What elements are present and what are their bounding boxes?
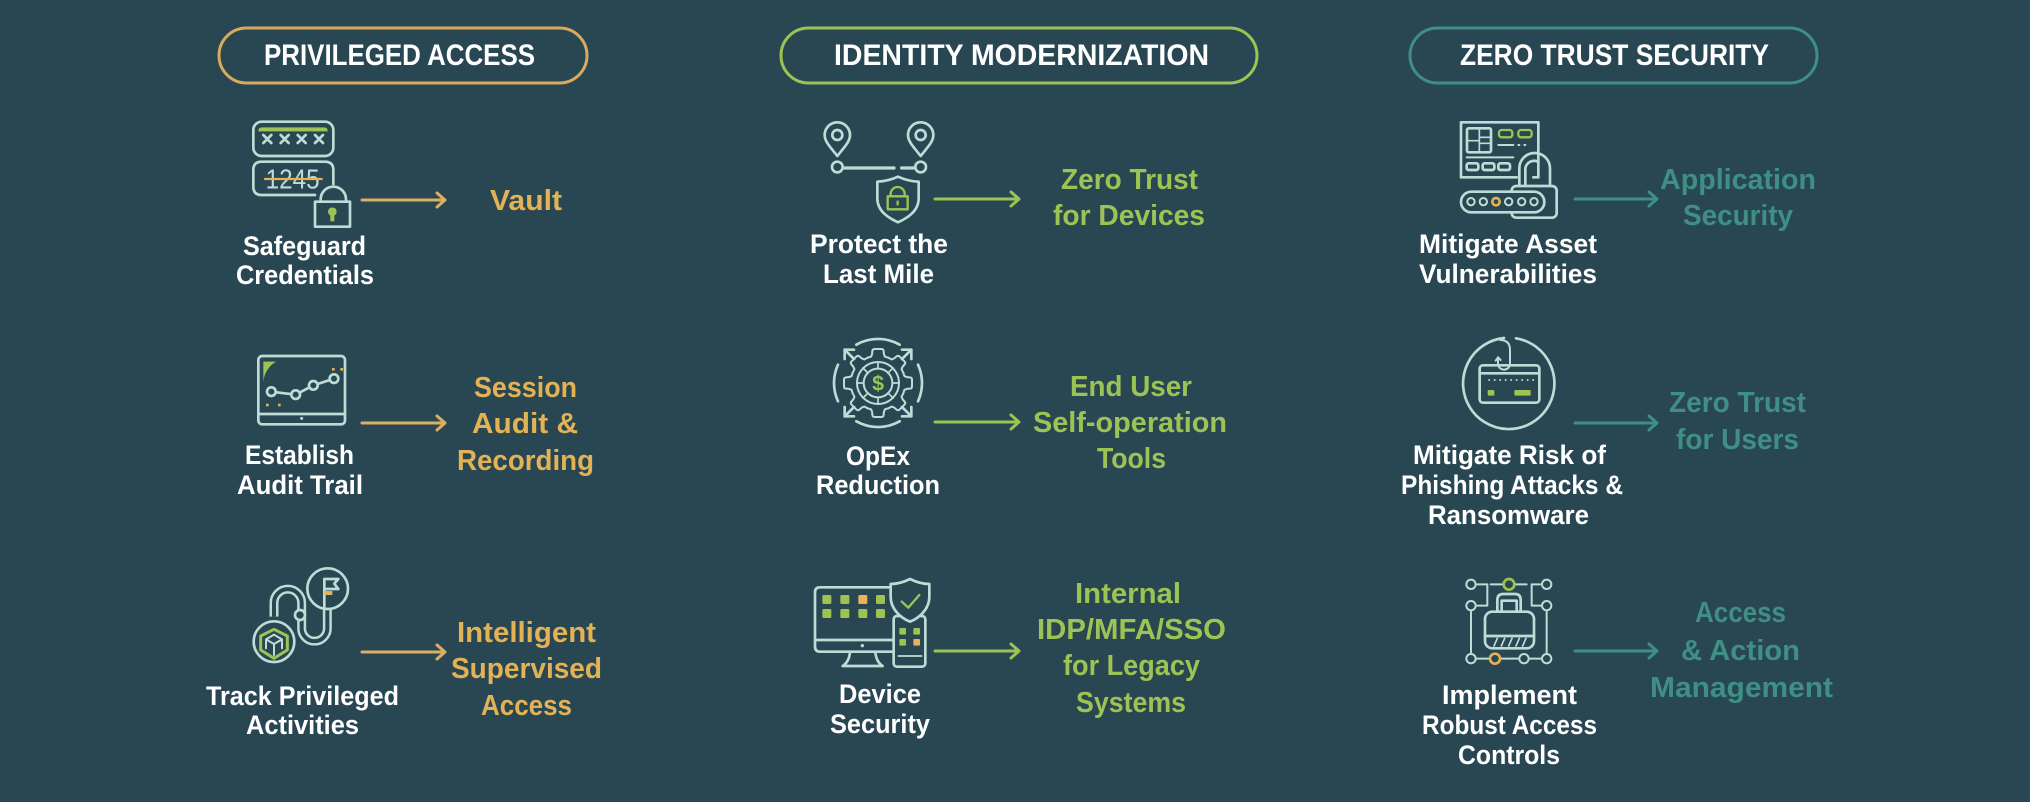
heading: identity modernization [781,28,1257,83]
label: track privileged activities [206,681,399,740]
heading: zero trust security [1410,28,1817,83]
icon: opex gear with dollar [834,339,922,427]
result: application security: Security [1683,200,1793,232]
label: opex reduction: Reduction [816,470,940,500]
label: opex reduction: OpEx [846,441,910,471]
result: intelligent supervised access: Intelligent [457,617,597,649]
result: end user self-operation tools: Self-operation [1033,407,1227,439]
result: internal idp mfa sso for legacy systems: IDP/MFA/SSO [1037,614,1226,646]
label: device security: Device [839,679,921,709]
label: mitigate risk of phishing attacks and ransomware: Mitigate Risk of [1413,440,1607,470]
result: access and action management [1650,597,1834,704]
result: zero trust for users [1669,387,1806,456]
label: device security [830,679,930,739]
heading: zero trust security: ZERO TRUST SECURITY [1460,39,1769,72]
icon: privileged activity track [254,568,348,662]
result: zero trust for users: Zero Trust [1669,387,1806,419]
result: session audit and recording: Session [474,372,577,404]
label: mitigate risk of phishing attacks and ransomware: Ransomware [1428,500,1589,530]
label: mitigate risk of phishing attacks and ransomware: Phishing Attacks & [1401,470,1623,500]
result: end user self-operation tools: Tools [1097,443,1166,475]
label: mitigate asset vulnerabilities: Vulnerabilities [1419,259,1597,289]
icon: monitor, phone and shield [815,579,929,667]
label: mitigate asset vulnerabilities: Mitigate Asset [1419,229,1597,259]
panel: zero trust security [1401,28,1834,770]
result: intelligent supervised access: Supervised [451,653,602,685]
icon: credentials and padlock: 1245 [266,163,320,194]
label: implement robust access controls: Robust Access [1422,710,1597,740]
icon: application panel and lock [1461,122,1557,218]
result: end user self-operation tools [1033,371,1227,475]
heading: privileged access [219,28,587,83]
label: safeguard credentials [236,231,374,290]
label: opex reduction [816,441,940,500]
result: zero trust for users: for Users [1676,424,1799,456]
icon: phishing hook and card [1463,338,1554,429]
arrow: device security to legacy systems [935,644,1019,658]
label: track privileged activities: Track Privileged [206,681,399,711]
result: intelligent supervised access [451,617,602,722]
icon: credentials and padlock [253,122,350,227]
label: establish audit trail: Audit Trail [237,470,363,500]
arrow: safeguard to vault [362,193,445,207]
arrow: audit trail to session recording [362,416,445,430]
result: internal idp mfa sso for legacy systems: for Legacy [1063,650,1200,682]
label: protect the last mile: Protect the [810,229,948,259]
result: internal idp mfa sso for legacy systems: Systems [1076,687,1186,719]
result: zero trust for devices: for Devices [1053,200,1205,232]
heading: privileged access: PRIVILEGED ACCESS [264,39,535,72]
result: zero trust for devices [1053,164,1205,232]
heading: identity modernization: IDENTITY MODERNIZATION [834,39,1209,72]
label: implement robust access controls: Controls [1458,740,1560,770]
result: vault: Vault [490,185,563,217]
result: access and action management: Access [1695,597,1786,629]
icon: circuit lock [1466,579,1551,664]
label: safeguard credentials: Safeguard [243,231,366,261]
label: implement robust access controls: Implement [1442,680,1577,710]
result: session audit and recording: Audit & [472,408,578,440]
arrow: phishing to zero trust for users [1575,416,1657,430]
result: internal idp mfa sso for legacy systems: Internal [1075,578,1181,610]
label: implement robust access controls [1422,680,1597,770]
result: end user self-operation tools: End User [1070,371,1192,403]
result: internal idp mfa sso for legacy systems [1037,578,1226,719]
label: protect the last mile: Last Mile [823,259,934,289]
label: establish audit trail [237,440,363,500]
arrow: vulnerabilities to application security [1575,192,1657,206]
result: intelligent supervised access: Access [481,690,572,722]
result: access and action management: Management [1650,672,1834,704]
result: application security [1660,164,1816,232]
arrow: track to supervised access [362,645,445,659]
label: mitigate asset vulnerabilities [1419,229,1597,289]
result: session audit and recording [457,372,594,477]
arrow: opex to self-operation tools [935,415,1019,429]
icon: opex gear with dollar: $ [872,372,884,396]
label: establish audit trail: Establish [245,440,354,470]
label: device security: Security [830,709,930,739]
panel: identity modernization [781,28,1257,739]
result: application security: Application [1660,164,1816,196]
panel: privileged access [206,28,602,740]
result: access and action management: & Action [1681,635,1800,667]
label: mitigate risk of phishing attacks and ransomware [1401,440,1623,530]
result: zero trust for devices: Zero Trust [1061,164,1198,196]
icon: audit trail tablet [258,356,345,424]
arrow: access controls to action management [1575,644,1657,658]
arrow: last mile to zero trust for devices [935,192,1019,206]
icon: last mile pins and shield [825,122,933,222]
result: session audit and recording: Recording [457,445,594,477]
label: protect the last mile [810,229,948,289]
label: track privileged activities: Activities [246,710,359,740]
label: safeguard credentials: Credentials [236,260,374,290]
